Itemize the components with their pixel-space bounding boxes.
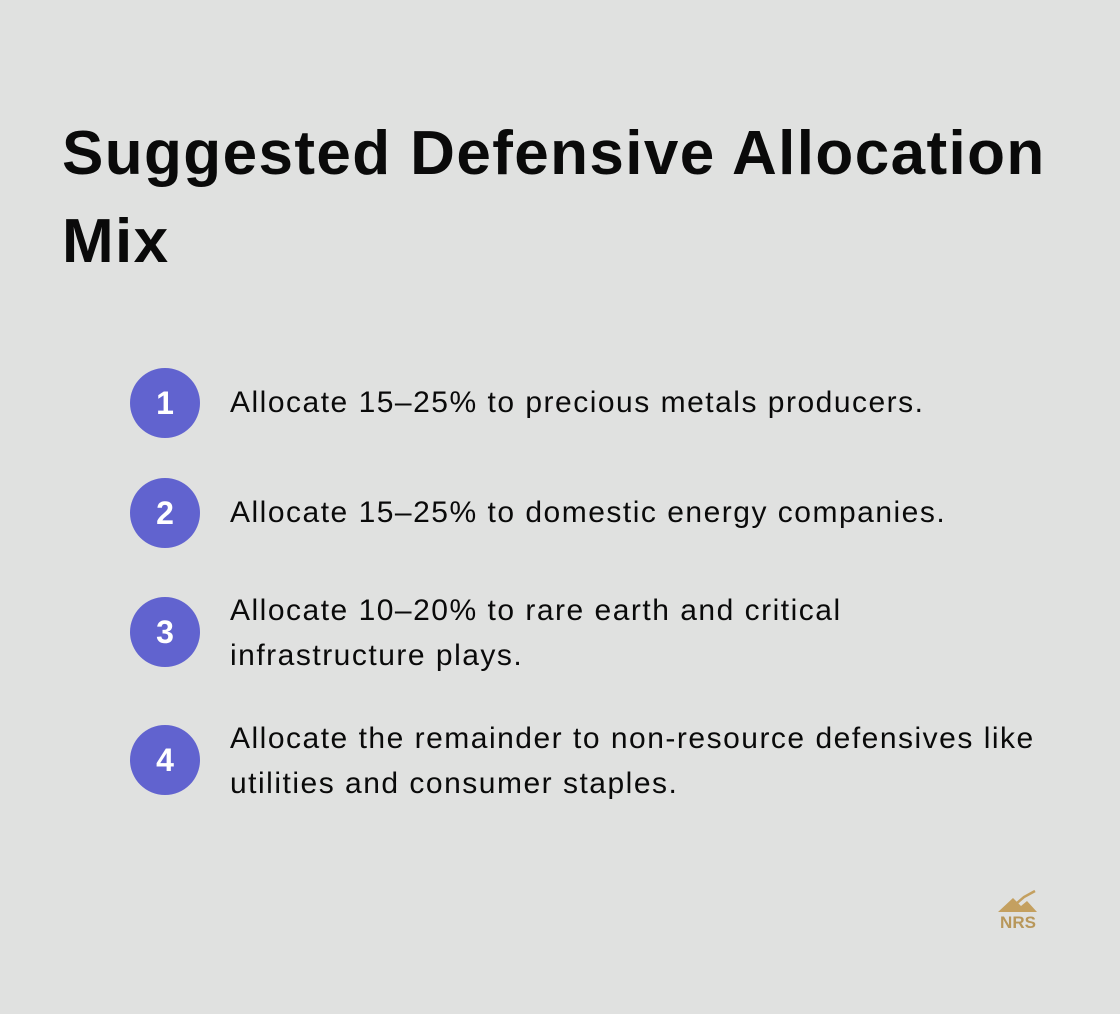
text 4: utilities and consumer staples. (230, 767, 678, 800)
badge 4: 4 (156, 742, 174, 778)
badge 3: 3 (156, 614, 174, 650)
text 3: Allocate 10–20% to rare earth and critical (230, 594, 842, 627)
badge 4 (130, 725, 200, 795)
text 3: infrastructure plays. (230, 639, 523, 672)
badge 2 (130, 478, 200, 548)
text 4: Allocate the remainder to non-resource defensives like (230, 722, 1035, 755)
item 4 (130, 722, 1035, 800)
logo: NRS (998, 890, 1037, 932)
badge 1 (130, 368, 200, 438)
text 3 (230, 594, 842, 672)
title: Suggested Defensive Allocation Mix (62, 119, 1046, 276)
badge 1: 1 (156, 385, 174, 421)
badge 2: 2 (156, 495, 174, 531)
badge 3 (130, 597, 200, 667)
text 2: Allocate 15–25% to domestic energy companies. (230, 496, 946, 529)
text 4 (230, 722, 1035, 800)
item 2 (130, 478, 946, 548)
item 3 (130, 594, 842, 672)
logo: NRS: NRS (1000, 913, 1036, 932)
text 1: Allocate 15–25% to precious metals producers. (230, 386, 925, 419)
item 1 (130, 368, 925, 438)
